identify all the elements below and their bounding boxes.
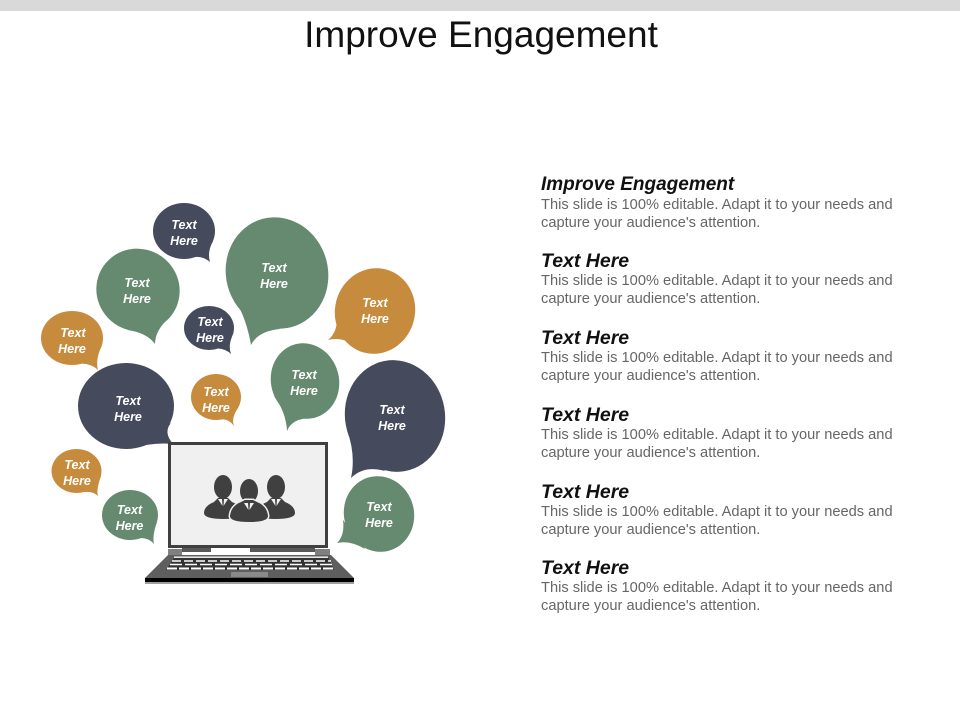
bubble: navy top: Text bbox=[171, 218, 197, 232]
text block: item 6: This slide is 100% editable. Adapt it to your needs and bbox=[541, 580, 893, 596]
text block: item 4: This slide is 100% editable. Adapt it to your needs and bbox=[541, 427, 893, 443]
bubble: green middle: Here bbox=[290, 384, 318, 398]
text block: Improve Engagement: Improve Engagement bbox=[541, 174, 734, 195]
bubble: navy top bbox=[153, 203, 215, 262]
bubble: green upper left: Here bbox=[123, 292, 151, 306]
bubble: navy left: Text bbox=[115, 394, 141, 408]
bubble: orange left: Here bbox=[58, 342, 86, 356]
person centre bbox=[230, 479, 268, 522]
laptop base bbox=[145, 555, 354, 578]
bubble: orange lower left: Here bbox=[63, 474, 91, 488]
person left bbox=[204, 475, 242, 519]
bubble: navy small bbox=[184, 306, 234, 354]
text block: item 6 bbox=[541, 557, 893, 614]
text block: item 4 bbox=[541, 404, 893, 461]
bubble: green lower left: Text bbox=[117, 503, 143, 517]
bubble: green lower left: Here bbox=[116, 519, 143, 533]
text block: item 4: Text Here bbox=[541, 404, 629, 426]
bubble: navy right: Here bbox=[378, 419, 406, 433]
bubble: navy small: Here bbox=[196, 331, 224, 345]
laptop keyboard bbox=[166, 556, 334, 570]
bubble: green upper left: Text bbox=[124, 276, 150, 290]
bubble: green right: Text bbox=[366, 500, 392, 514]
bubble: big green: Here bbox=[260, 277, 288, 291]
bubble: big green: Text bbox=[261, 261, 287, 275]
text block: item 2: Text Here bbox=[541, 250, 629, 272]
text block: item 3 bbox=[541, 327, 893, 384]
bubble: orange left: Text bbox=[60, 326, 86, 340]
text block: item 3: Text Here bbox=[541, 327, 629, 349]
text block: item 5: This slide is 100% editable. Adapt it to your needs and bbox=[541, 504, 893, 520]
text block: Improve Engagement bbox=[541, 174, 893, 231]
laptop trackpad bbox=[231, 572, 268, 577]
icon: three business people bbox=[204, 475, 295, 522]
bubble: orange left bbox=[41, 311, 103, 370]
laptop hinge bbox=[168, 549, 330, 555]
top bar bbox=[0, 0, 960, 11]
person right bbox=[257, 475, 295, 519]
text block: item 6: Text Here bbox=[541, 557, 629, 579]
text block: item 3: This slide is 100% editable. Adapt it to your needs and bbox=[541, 350, 893, 366]
laptop screen bbox=[170, 444, 326, 546]
bubble: green upper left bbox=[80, 232, 196, 348]
bubble: big green bbox=[213, 206, 341, 345]
bubble: orange small: Here bbox=[202, 401, 230, 415]
bubble: green middle: Text bbox=[291, 368, 317, 382]
text block: item 2 bbox=[541, 250, 893, 307]
bubble: navy left: Here bbox=[114, 410, 142, 424]
bubble: navy left bbox=[78, 363, 174, 449]
shirt collars bbox=[218, 499, 281, 510]
text block: item 4: capture your audience's attention. bbox=[541, 445, 760, 461]
bubble: orange right bbox=[325, 259, 425, 363]
bubble: orange lower left: Text bbox=[64, 458, 90, 472]
bubble: orange small bbox=[191, 374, 241, 426]
bubble: navy top: Here bbox=[170, 234, 198, 248]
bubble: orange small: Text bbox=[203, 385, 229, 399]
bubble: navy small: Text bbox=[197, 315, 223, 329]
text block: item 3: capture your audience's attention. bbox=[541, 368, 760, 384]
bubble: orange lower left bbox=[52, 449, 102, 496]
text block: item 6: capture your audience's attention. bbox=[541, 598, 760, 614]
bubble: orange right: Here bbox=[361, 312, 389, 326]
text block: item 2: capture your audience's attention. bbox=[541, 291, 760, 307]
icon: laptop bbox=[145, 444, 354, 584]
text block: item 5: capture your audience's attention. bbox=[541, 522, 760, 538]
bubble: orange right: Text bbox=[362, 296, 388, 310]
text block: item 5 bbox=[541, 481, 893, 538]
bubble: navy right: Text bbox=[379, 403, 405, 417]
bubble: green middle bbox=[262, 335, 348, 431]
text block: item 2: This slide is 100% editable. Adapt it to your needs and bbox=[541, 273, 893, 289]
bubble: green right bbox=[335, 468, 423, 560]
text block: Improve Engagement: This slide is 100% editable. Adapt it to your needs and bbox=[541, 197, 893, 213]
text block: Improve Engagement: capture your audience's attention. bbox=[541, 215, 760, 231]
bubble: green right: Here bbox=[365, 516, 393, 530]
bubble: green lower left bbox=[102, 490, 158, 544]
bubble: navy right bbox=[336, 352, 454, 480]
text block: item 5: Text Here bbox=[541, 481, 629, 503]
title: Improve Engagement bbox=[304, 14, 658, 55]
